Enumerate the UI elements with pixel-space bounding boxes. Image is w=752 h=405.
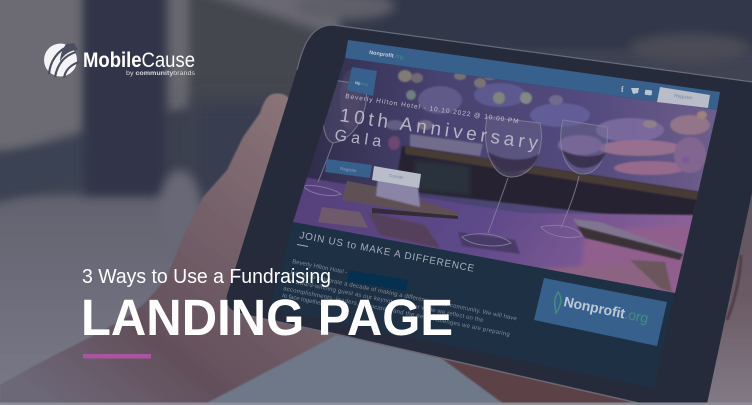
register button: Register [340,166,358,173]
social icons: f [621,85,624,94]
body copy: Beverly Hilton Hotel - [292,259,348,276]
subtitle: 3 Ways to Use a Fundraising [82,265,331,288]
body copy: an award-winning guest as our keynote speaker while we reflect on the [287,278,484,324]
hand crease [727,255,741,320]
event title: Gala [333,127,382,151]
heading rule [297,244,308,247]
logo byline: by community brands [126,71,195,77]
napkin right [574,218,682,254]
event title: 10th Anniversary [338,105,540,154]
body copy [282,259,518,338]
header register button: Register [674,93,693,102]
coaster [458,232,520,254]
dark room band [395,146,700,224]
register button [325,159,372,178]
bokeh lights [340,69,710,176]
nonprofit logo panel: Nonprofit.org [562,293,650,326]
body copy: to face together. [282,293,324,307]
wine bands [488,152,539,172]
nonprofit logo panel [534,278,667,346]
event date text: Beverly Hilton Hotel - 10.10.2022 @ 10:00 PM [345,93,519,125]
social icons [621,85,652,96]
lower right finger [437,355,640,405]
square logo tile [347,67,377,96]
screen header band [345,40,720,110]
donate button: Donate [389,173,404,180]
tablet body [226,25,752,404]
screen photo [293,58,717,293]
section heading: JOIN US to MAKE A DIFFERENCE [298,230,475,275]
tablet [226,25,752,404]
donate button [372,166,421,188]
logo wordmark: MobileCause [83,49,195,72]
header register button [657,87,710,108]
tabletop in photo [290,177,700,295]
right hand [705,185,752,405]
title: LANDING PAGE [81,289,453,346]
logo icon [44,43,79,78]
tablet edge highlight [297,25,752,85]
body copy: Join us to celebrate a decade of making a difference in our community. We will have [289,270,518,322]
screen lower panel [270,222,675,388]
accent bar [83,354,151,358]
square logo tile: Np.org [355,80,369,87]
place setting left [342,181,458,219]
wine glasses [303,80,608,246]
back shelf [410,134,483,156]
redacted block [347,270,408,291]
header logo: Nonprofit.org [369,50,403,61]
left hand [0,93,345,405]
table surface [200,330,510,405]
body copy: accomplishments, leaders, advocates, and the new challenges we are preparing [283,286,510,338]
logo [44,43,195,78]
